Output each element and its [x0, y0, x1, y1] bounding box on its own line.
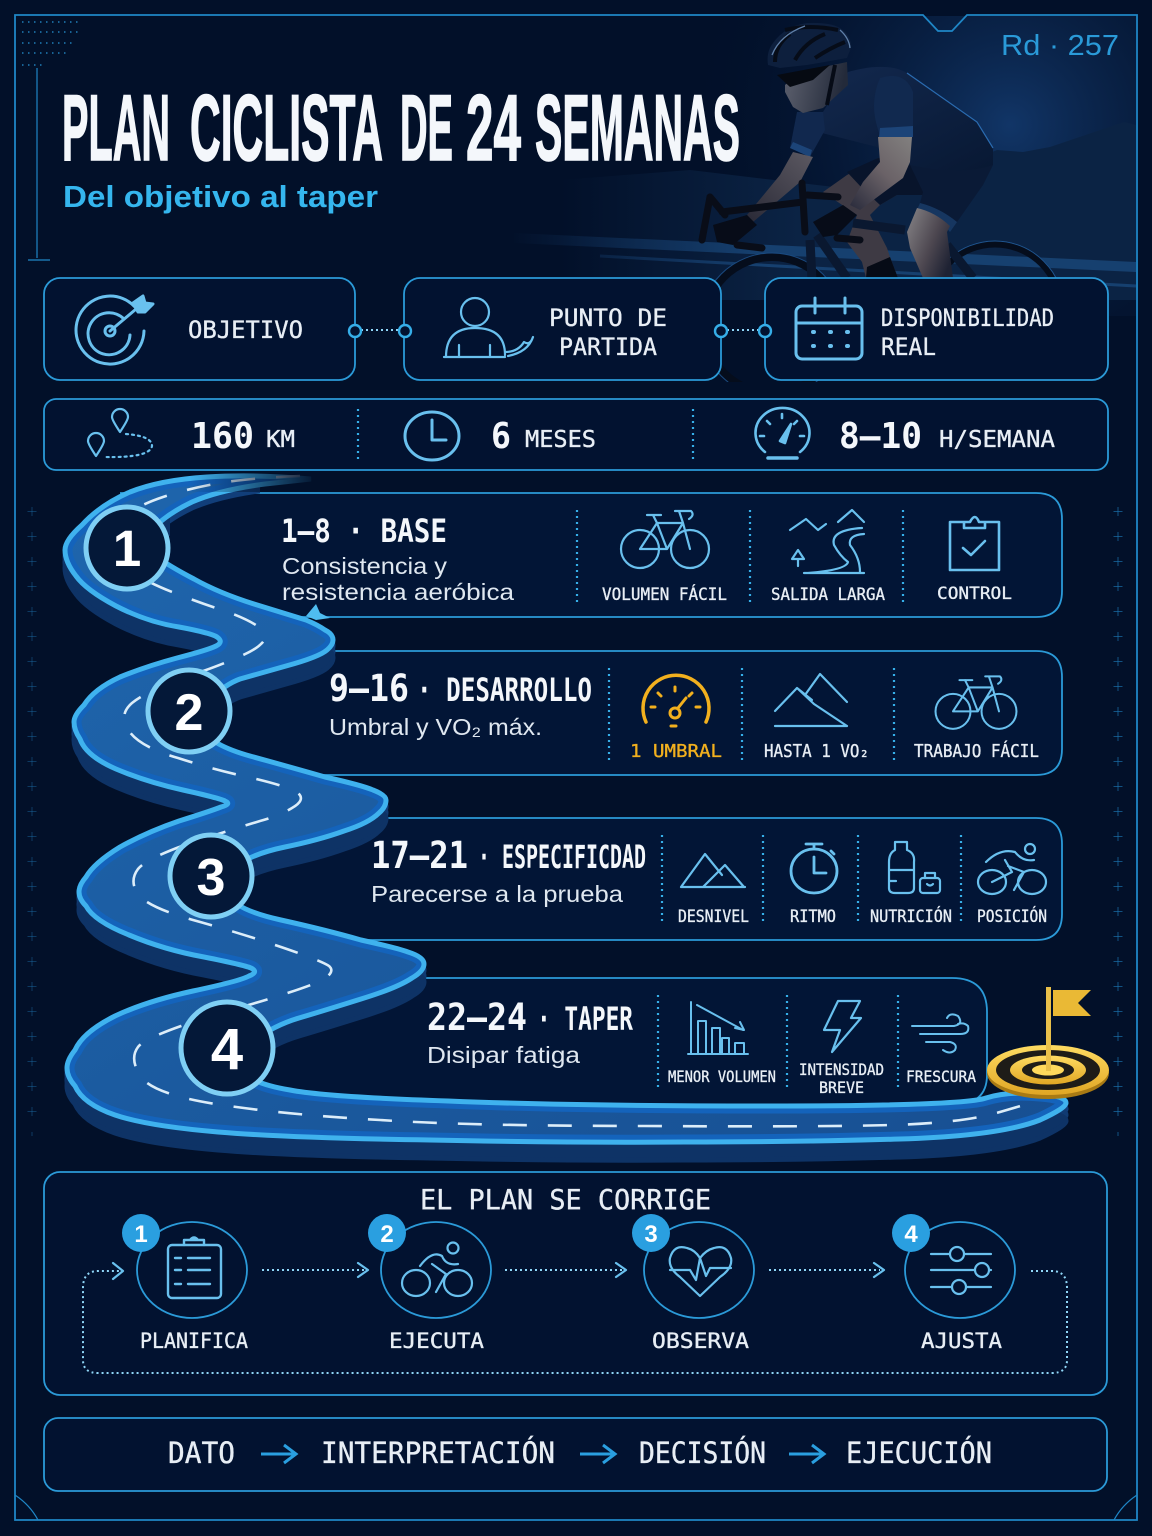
icon: person [444, 298, 533, 357]
label: ejecucion: EJECUCIÓN [846, 1436, 992, 1470]
panel: phase 2 desarrollo [200, 651, 1062, 775]
label: desnivel: DESNIVEL [678, 907, 749, 926]
heading: 22-24 taper: 22–24 [427, 996, 527, 1039]
label: interpretacion: INTERPRETACIÓN [321, 1436, 555, 1470]
title: DE [400, 75, 453, 180]
label: frescura: FRESCURA [906, 1067, 976, 1086]
stat: 160 km [191, 416, 295, 457]
label: trabajo facil: TRABAJO FÁCIL [914, 740, 1039, 762]
icon: cyclist [402, 1242, 472, 1296]
label: salida larga: SALIDA LARGA [771, 585, 885, 605]
heading: 17-21 especificidad: 17–21 [371, 834, 468, 877]
hero illustration: cyclist over mountains [514, 16, 1136, 397]
label: nutricion: NUTRICIÓN [870, 907, 952, 926]
step 2 ejecuta [368, 1214, 491, 1353]
arrow 3 [769, 1263, 884, 1277]
stat: 8-10 h/semana [839, 416, 1055, 457]
stat: 160 km: KM [266, 427, 295, 453]
phase marker 3 [170, 835, 252, 917]
label: decision: DECISIÓN [639, 1436, 766, 1470]
step 1 planifica [122, 1214, 248, 1353]
label: punto de partida: PUNTO DE [549, 304, 667, 332]
stat: 6 meses [491, 416, 596, 457]
label: disponibilidad real: DISPONIBILIDAD [881, 304, 1054, 332]
panel: decision chain [44, 1418, 1107, 1491]
arrow 1 [262, 1263, 368, 1277]
winding road [65, 472, 1066, 1160]
panel: phase 4 taper [260, 978, 987, 1105]
label: 1 umbral: 1 UMBRAL [630, 741, 722, 762]
label: control: CONTROL [937, 584, 1012, 604]
heading: el plan se corrige: EL PLAN SE CORRIGE [420, 1183, 711, 1216]
arrow: decision to ejecucion [789, 1445, 824, 1463]
icon: declining bars [688, 1002, 748, 1054]
label: intensidad breve: BREVE [819, 1078, 864, 1097]
heading: 22-24 taper [427, 996, 634, 1039]
icon: clipboard check [950, 517, 999, 570]
description: phase 4: Disipar fatiga [427, 1042, 580, 1068]
heading: 1-8 base: 1–8 · BASE [281, 512, 447, 550]
label: intensidad breve [799, 1060, 884, 1097]
label: hasta 1 vo2: HASTA 1 VO₂ [764, 741, 869, 762]
step 1 planifica: 1 [134, 1221, 148, 1248]
body [910, 165, 993, 222]
step 2 ejecuta: EJECUTA [389, 1329, 484, 1353]
panel: phase 1 base [120, 493, 1062, 617]
icon: calendar [796, 298, 862, 359]
panel: punto de partida [404, 278, 721, 380]
edition label: Rd · 257 [1001, 30, 1119, 62]
label: disponibilidad real: REAL [881, 333, 936, 361]
stat: 6 meses: MESES [525, 427, 596, 453]
label: disponibilidad real [881, 304, 1054, 361]
icon: clock [405, 412, 459, 460]
label: ritmo: RITMO [790, 907, 836, 926]
phase marker 2: 2 [175, 684, 203, 742]
icon: bike [621, 511, 709, 568]
icon: bottle and food [889, 842, 940, 893]
label: menor volumen: MENOR VOLUMEN [668, 1067, 776, 1086]
icon: heart rate [670, 1247, 731, 1296]
panel: el plan se corrige [44, 1172, 1107, 1395]
panel: phase 3 especificidad [240, 818, 1062, 940]
label: dato: DATO [168, 1436, 235, 1470]
phase marker 1: 1 [113, 520, 141, 577]
description: phase 1: resistencia aeróbica [282, 579, 514, 605]
label: posicion: POSICIÓN [977, 907, 1047, 926]
title: 24 [466, 75, 521, 180]
step 4 ajusta: 4 [904, 1221, 918, 1248]
description: phase 2: Umbral y VO₂ máx. [329, 714, 542, 740]
phase marker 4 [181, 1002, 273, 1094]
panel: objetivo [44, 278, 355, 380]
title [62, 75, 740, 180]
head and helmet [785, 62, 848, 113]
phase marker 3: 3 [197, 849, 225, 907]
icon: route [88, 409, 152, 457]
feedback loop arrow [83, 1263, 1067, 1373]
description: phase 1 [282, 553, 514, 605]
icon: checklist [168, 1238, 221, 1298]
step 3 observa: 3 [644, 1221, 658, 1248]
stat: 8-10 h/semana: H/SEMANA [939, 427, 1055, 453]
stat: 6 meses: 6 [491, 416, 511, 457]
step 4 ajusta [892, 1214, 1015, 1353]
heading: 9-16 desarrollo: · DESARROLLO [417, 671, 592, 709]
step 4 ajusta: AJUSTA [921, 1329, 1002, 1353]
arrow: interpretacion to decision [580, 1445, 615, 1463]
stat: 8-10 h/semana: 8–10 [839, 416, 922, 457]
label: punto de partida [549, 304, 667, 361]
label: volumen facil: VOLUMEN FÁCIL [602, 583, 727, 605]
icon: cyclist [978, 844, 1046, 894]
description: phase 1: Consistencia y [282, 553, 448, 579]
icon: mountains [775, 674, 847, 726]
icon: elevation mountains [681, 854, 745, 887]
phase marker 2 [148, 670, 230, 752]
bike frame and far leg [823, 158, 898, 278]
label: punto de partida: PARTIDA [559, 333, 658, 361]
title: CICLISTA [190, 75, 383, 180]
arrow: dato to interpretacion [261, 1445, 296, 1463]
description: phase 3: Parecerse a la prueba [371, 881, 623, 907]
connectors between top boxes [349, 325, 771, 337]
step 3 observa [632, 1214, 754, 1353]
heading: 22-24 taper: · TAPER [537, 1000, 634, 1038]
subtitle: Del objetivo al taper [63, 179, 378, 214]
icon: lightning bolt [824, 1001, 861, 1052]
icon: sliders [931, 1247, 991, 1294]
step 3 observa: OBSERVA [652, 1329, 749, 1353]
handlebars and gloves [702, 183, 860, 248]
step 2 ejecuta: 2 [380, 1221, 394, 1248]
label: intensidad breve: INTENSIDAD [799, 1060, 884, 1079]
icon: stopwatch [791, 844, 837, 893]
stat: 160 km: 160 [191, 416, 254, 457]
goal flag on target [987, 987, 1109, 1099]
label: objetivo: OBJETIVO [188, 316, 303, 344]
phase marker 4: 4 [211, 1017, 243, 1082]
step 1 planifica: PLANIFICA [140, 1329, 248, 1353]
heading: 17-21 especificidad: · ESPECIFICDAD [478, 838, 646, 876]
heading: 9-16 desarrollo [329, 667, 592, 710]
icon: bike [936, 676, 1016, 729]
icon: target [76, 296, 153, 364]
icon: mountain road [790, 510, 864, 573]
icon: speedometer [755, 408, 810, 458]
panel: disponibilidad real [765, 278, 1108, 380]
text: SEMANAS [535, 75, 740, 180]
heading: 9-16 desarrollo: 9–16 [329, 667, 409, 710]
icon: amber gauge [643, 675, 709, 726]
title: PLAN [62, 75, 170, 180]
heading: 17-21 especificidad [371, 834, 646, 877]
panel: key stats [44, 399, 1108, 470]
icon: wind [912, 1014, 968, 1052]
arrow 2 [505, 1263, 626, 1277]
phase marker 1 [86, 507, 168, 589]
